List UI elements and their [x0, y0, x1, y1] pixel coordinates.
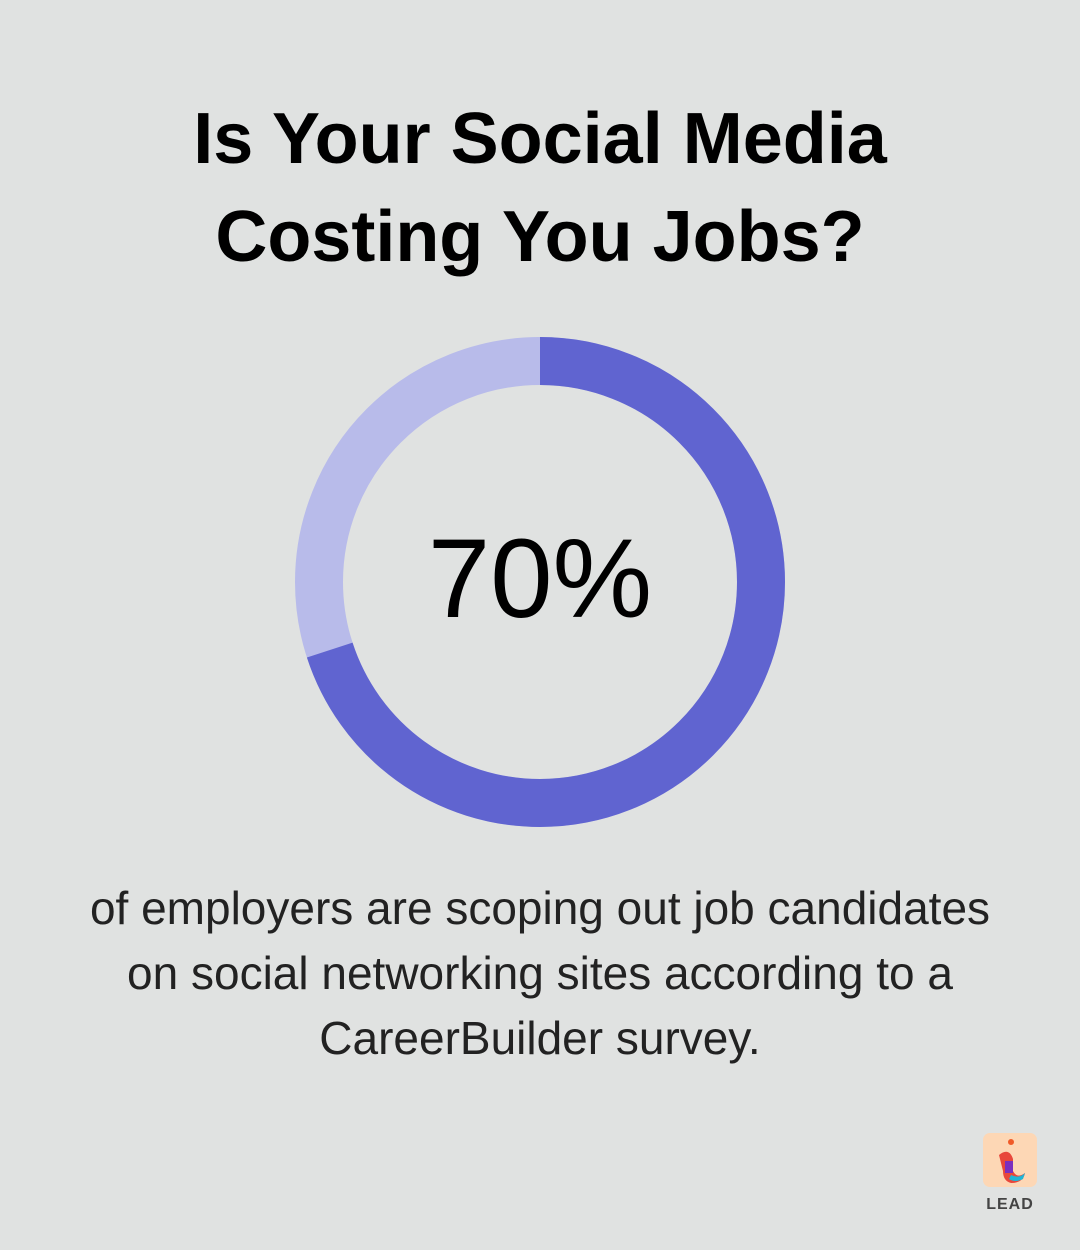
ring: remaining 30% [319, 361, 761, 803]
ring: 70% segment [319, 361, 761, 803]
description text: of employers are scoping out job candidates on social networking sites according to a CareerBuilder survey. [90, 882, 990, 1064]
logo icon [983, 1133, 1037, 1187]
title: Costing You Jobs? [215, 197, 865, 277]
title [193, 99, 888, 277]
percentage value: 70% [428, 516, 652, 641]
logo [983, 1133, 1037, 1213]
logo text: LEAD [986, 1196, 1034, 1213]
title: Is Your Social Media [193, 99, 887, 179]
